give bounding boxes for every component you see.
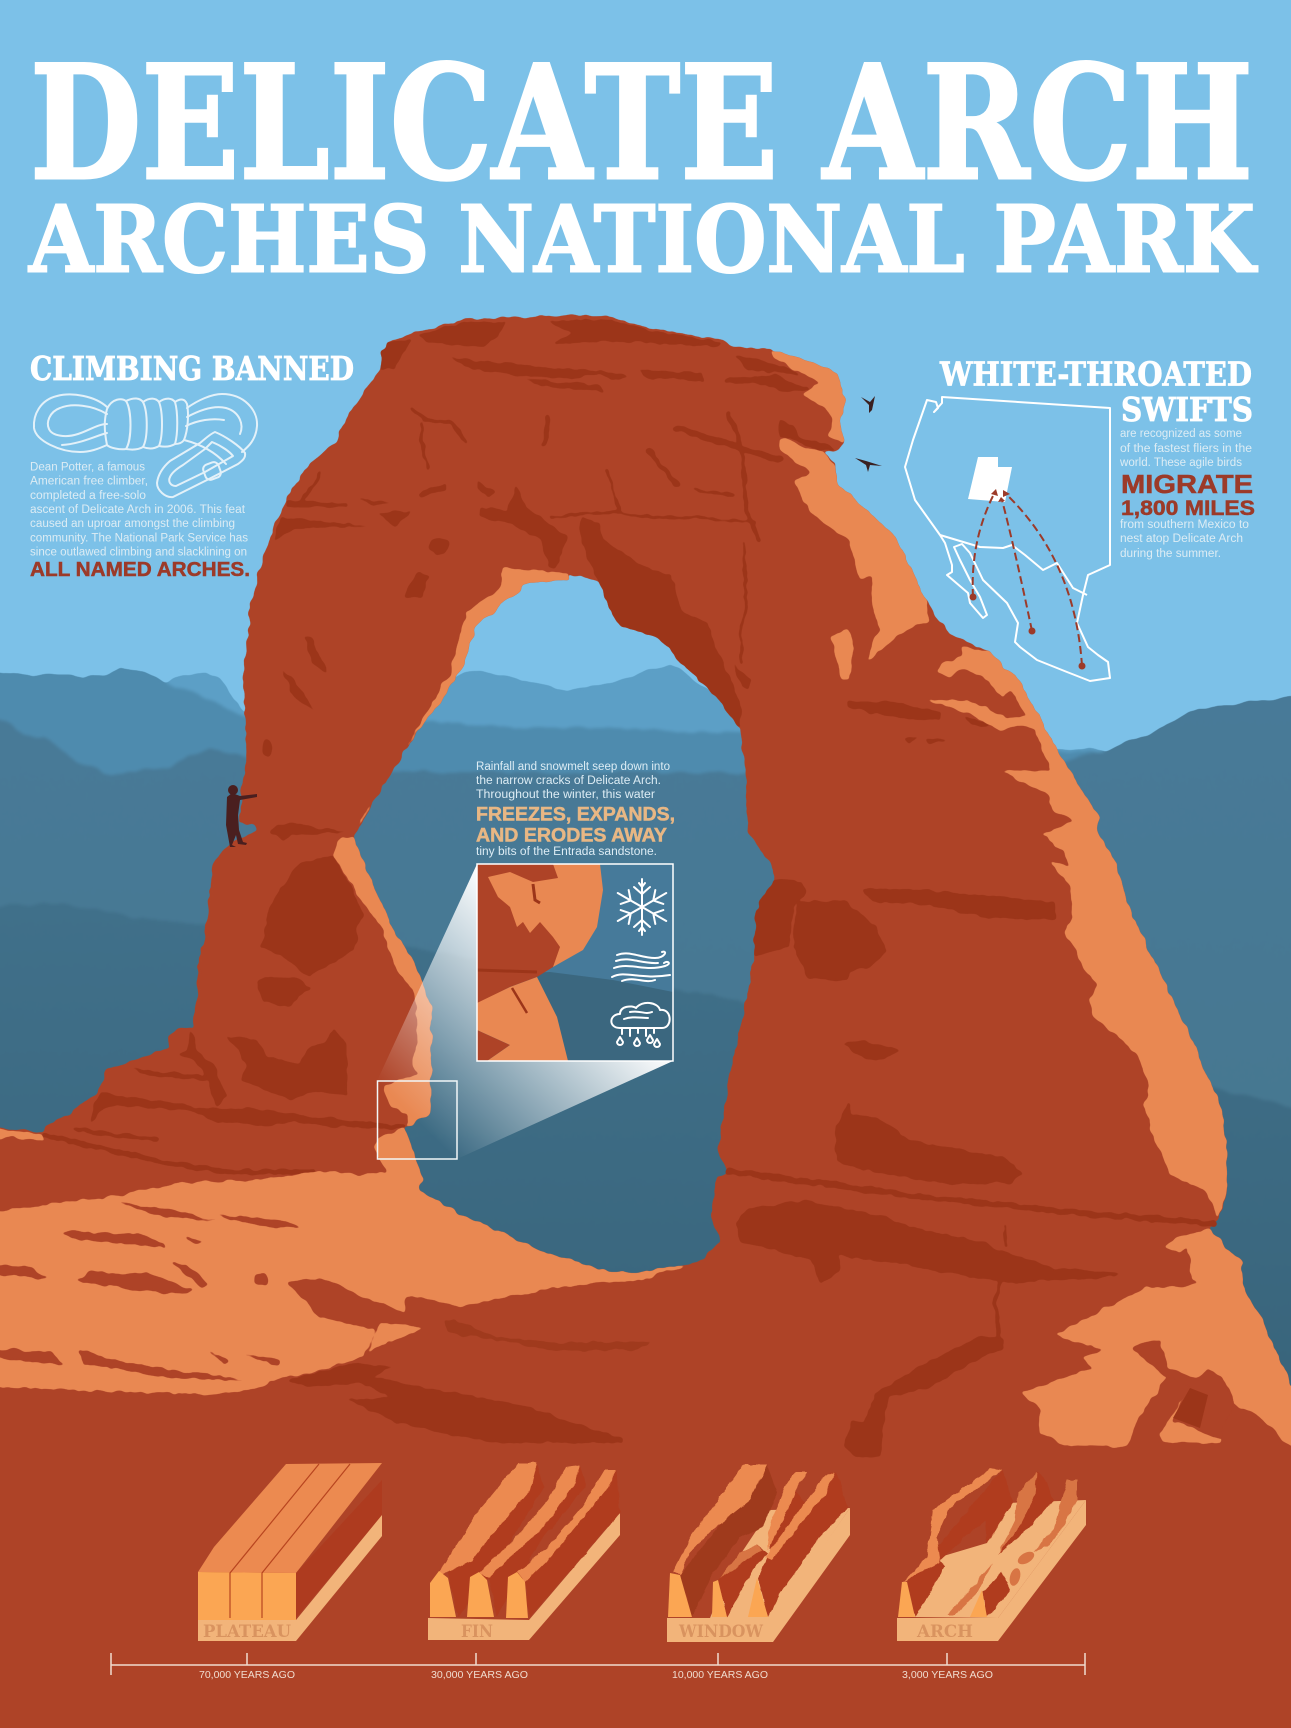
person standing on the arch bbox=[226, 785, 257, 847]
erosion stage: window bbox=[667, 1465, 850, 1642]
swifts heading bbox=[939, 354, 1253, 429]
icon: rope and carabiner bbox=[34, 394, 257, 497]
window label: WINDOW bbox=[678, 1622, 763, 1641]
climbing banned body text bbox=[30, 462, 248, 559]
swifts heading: WHITE-THROATED bbox=[939, 354, 1252, 394]
utah bbox=[968, 457, 1012, 502]
climbing banned body text: completed a free-solo bbox=[30, 490, 146, 502]
migration routes bbox=[973, 492, 1082, 666]
plateau label: PLATEAU bbox=[203, 1622, 292, 1641]
climbing banned body text: American free climber, bbox=[30, 476, 148, 488]
arch label: ARCH bbox=[916, 1622, 973, 1641]
erosion stage: fin bbox=[428, 1463, 620, 1641]
panel: climbing banned bbox=[30, 349, 354, 581]
icon: snowflake bbox=[614, 879, 670, 935]
migrate callout: MIGRATE bbox=[1121, 471, 1253, 499]
swifts body text: during the summer. bbox=[1120, 548, 1221, 560]
climbing banned body text: since outlawed climbing and slacklining on bbox=[30, 547, 247, 559]
climbing banned body text: caused an uproar amongst the climbing bbox=[30, 518, 235, 530]
freeze thaw text: tiny bits of the Entrada sandstone. bbox=[476, 846, 657, 858]
icon: wind bbox=[612, 952, 670, 981]
freeze thaw text bbox=[476, 761, 675, 858]
freeze thaw text: AND ERODES AWAY bbox=[476, 825, 667, 847]
all named arches callout: ALL NAMED ARCHES. bbox=[30, 559, 250, 581]
dark rock shading and cracks bbox=[45, 319, 1214, 1457]
swifts body text bbox=[1119, 428, 1252, 560]
timeline labels: 70,000 YEARS AGO bbox=[199, 1669, 295, 1681]
swifts body text: of the fastest fliers in the bbox=[1120, 443, 1252, 455]
swifts body text: are recognized as some bbox=[1120, 428, 1242, 440]
rock streaks on the sunlit ground bbox=[0, 1203, 1234, 1438]
migrate callout: 1,800 MILES bbox=[1121, 497, 1255, 520]
swifts heading: SWIFTS bbox=[1121, 390, 1253, 429]
climbing banned body text: community. The National Park Service has bbox=[30, 533, 248, 545]
freeze thaw text: Rainfall and snowmelt seep down into bbox=[476, 761, 670, 773]
sunlit orange rock faces bbox=[0, 350, 1291, 1466]
timeline labels bbox=[199, 1669, 993, 1681]
timeline bbox=[111, 1653, 1085, 1681]
climbing banned heading: CLIMBING BANNED bbox=[30, 349, 354, 388]
magnified inset panel bbox=[477, 864, 673, 1061]
climbing banned body text: ascent of Delicate Arch in 2006. This feat bbox=[30, 504, 246, 516]
freeze thaw text: the narrow cracks of Delicate Arch. bbox=[476, 775, 661, 787]
migration map bbox=[905, 397, 1110, 681]
erosion stage: plateau bbox=[198, 1463, 382, 1641]
timeline labels: 30,000 YEARS AGO bbox=[431, 1669, 528, 1681]
freeze thaw text: FREEZES, EXPANDS, bbox=[476, 804, 675, 826]
swifts body text: nest atop Delicate Arch bbox=[1120, 533, 1243, 545]
freeze thaw text: Throughout the winter, this water bbox=[476, 789, 655, 801]
magnified area marker bbox=[378, 1081, 457, 1159]
climbing banned body text: Dean Potter, a famous bbox=[30, 462, 145, 474]
migrate callout bbox=[1121, 471, 1255, 520]
timeline labels: 3,000 YEARS AGO bbox=[902, 1669, 993, 1681]
swifts body text: from southern Mexico to bbox=[1120, 519, 1249, 531]
magnifier light cone bbox=[377, 864, 673, 1159]
fin label: FIN bbox=[461, 1622, 493, 1641]
swift birds bbox=[855, 396, 882, 472]
timeline labels: 10,000 YEARS AGO bbox=[672, 1669, 768, 1681]
title bbox=[28, 32, 1258, 294]
distant mountain ranges bbox=[0, 663, 1291, 1500]
icon: rain cloud bbox=[611, 1003, 670, 1047]
erosion stage: arch bbox=[897, 1468, 1086, 1641]
swifts body text: world. These agile birds bbox=[1119, 457, 1242, 469]
panel: white-throated swifts bbox=[905, 354, 1255, 681]
